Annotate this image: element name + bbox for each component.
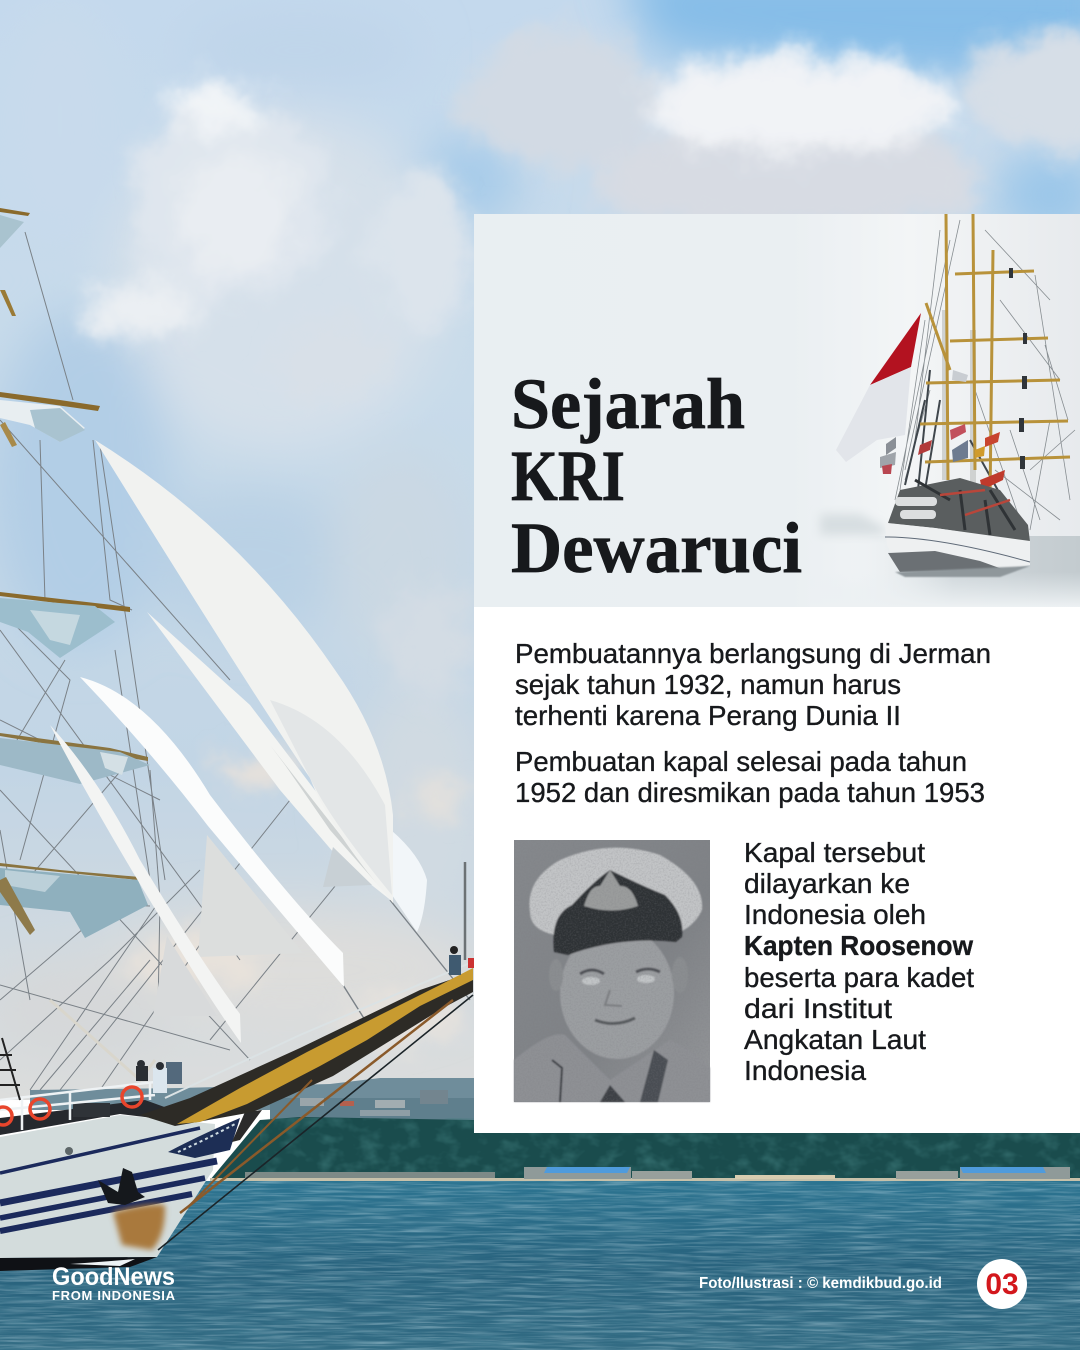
title text: Sejarah: [511, 364, 745, 444]
small ship photo: [810, 214, 1080, 607]
logo: GoodNews from Indonesia: FROM INDONESIA: [52, 1288, 176, 1303]
furled sail: yard 3: [0, 733, 150, 784]
rigging: [895, 220, 1075, 530]
title text: [511, 364, 802, 588]
title text: KRI: [511, 436, 625, 516]
grey sail behind fourth jib: [153, 936, 217, 1016]
sail: fourth jib: [50, 725, 241, 1043]
Indonesian flag: [836, 313, 921, 462]
panel: white text area: [474, 607, 1080, 1133]
bowsprit net with gold sail: [140, 963, 473, 1126]
ship superstructure and hull: [885, 478, 1030, 577]
rigging lines: [0, 232, 470, 1090]
background photo: sea: [0, 1181, 1080, 1350]
furled sails on masts: [945, 310, 973, 500]
text block: captain: Angkatan Laut: [744, 1024, 926, 1055]
panel: title header: [474, 214, 1080, 607]
bowsprit stays: [158, 995, 473, 1250]
logo: GoodNews from Indonesia: GoodNews: [52, 1263, 175, 1291]
sail: third jib: [80, 677, 344, 987]
sail: small white clew: [391, 830, 427, 932]
crew on bow deck: [136, 1060, 167, 1093]
text block: construction history: [515, 638, 991, 731]
title text: Dewaruci: [511, 508, 802, 588]
life rings: [0, 1087, 142, 1125]
deck and railing: [0, 1038, 195, 1135]
hull: [0, 1115, 217, 1271]
text block: construction history: terhenti karena Perang Dunia II: [515, 700, 901, 731]
text block: captain: beserta para kadet: [744, 962, 974, 993]
grey sail behind third jib: [198, 835, 303, 957]
crew on the yards: [1009, 268, 1027, 469]
large sailing ship: [0, 208, 474, 1271]
text block: completion: 1952 dan diresmikan pada tahun 1953: [515, 777, 985, 808]
photo credit: Foto/Ilustrasi : © kemdikbud.go.id: [699, 1275, 942, 1292]
text block: captain: Kapal tersebut: [744, 837, 925, 868]
furled sail: top yard: [0, 208, 30, 316]
page number badge: [977, 1259, 1027, 1309]
text block: captain: dilayarkan ke: [744, 868, 910, 899]
text block: construction history: Pembuatannya berlangsung di Jerman: [515, 638, 991, 669]
text block: captain: [744, 837, 974, 1086]
sail: large main jib: [95, 440, 393, 903]
text block: captain: Indonesia oleh: [744, 899, 926, 930]
text block: captain: Kapten Roosenow: [744, 930, 973, 961]
furled sail: yard 4: [0, 863, 148, 938]
text block: completion: Pembuatan kapal selesai pada tahun: [515, 746, 967, 777]
signal flags: [880, 370, 1005, 490]
background photo: far hills and town: [30, 1078, 480, 1122]
furled sail: yard 2: [0, 592, 130, 658]
background photo: forest shoreline: [210, 1117, 1080, 1181]
text block: captain: Indonesia: [744, 1055, 866, 1086]
masts and yards: [920, 214, 1070, 500]
logo: GoodNews from Indonesia: [52, 1263, 176, 1303]
bow ornament: [168, 1110, 262, 1158]
text block: captain: dari Institut: [744, 993, 892, 1024]
sail: thin jib behind: [147, 612, 393, 902]
sailor on bowsprit: [449, 946, 474, 975]
page number badge: 03: [985, 1268, 1019, 1301]
furled sail: yard 1: [0, 392, 100, 447]
text block: construction history: sejak tahun 1932, namun harus: [515, 669, 901, 700]
text block: completion: [515, 746, 985, 808]
portrait of Kapten Roosenow: [514, 840, 710, 1102]
